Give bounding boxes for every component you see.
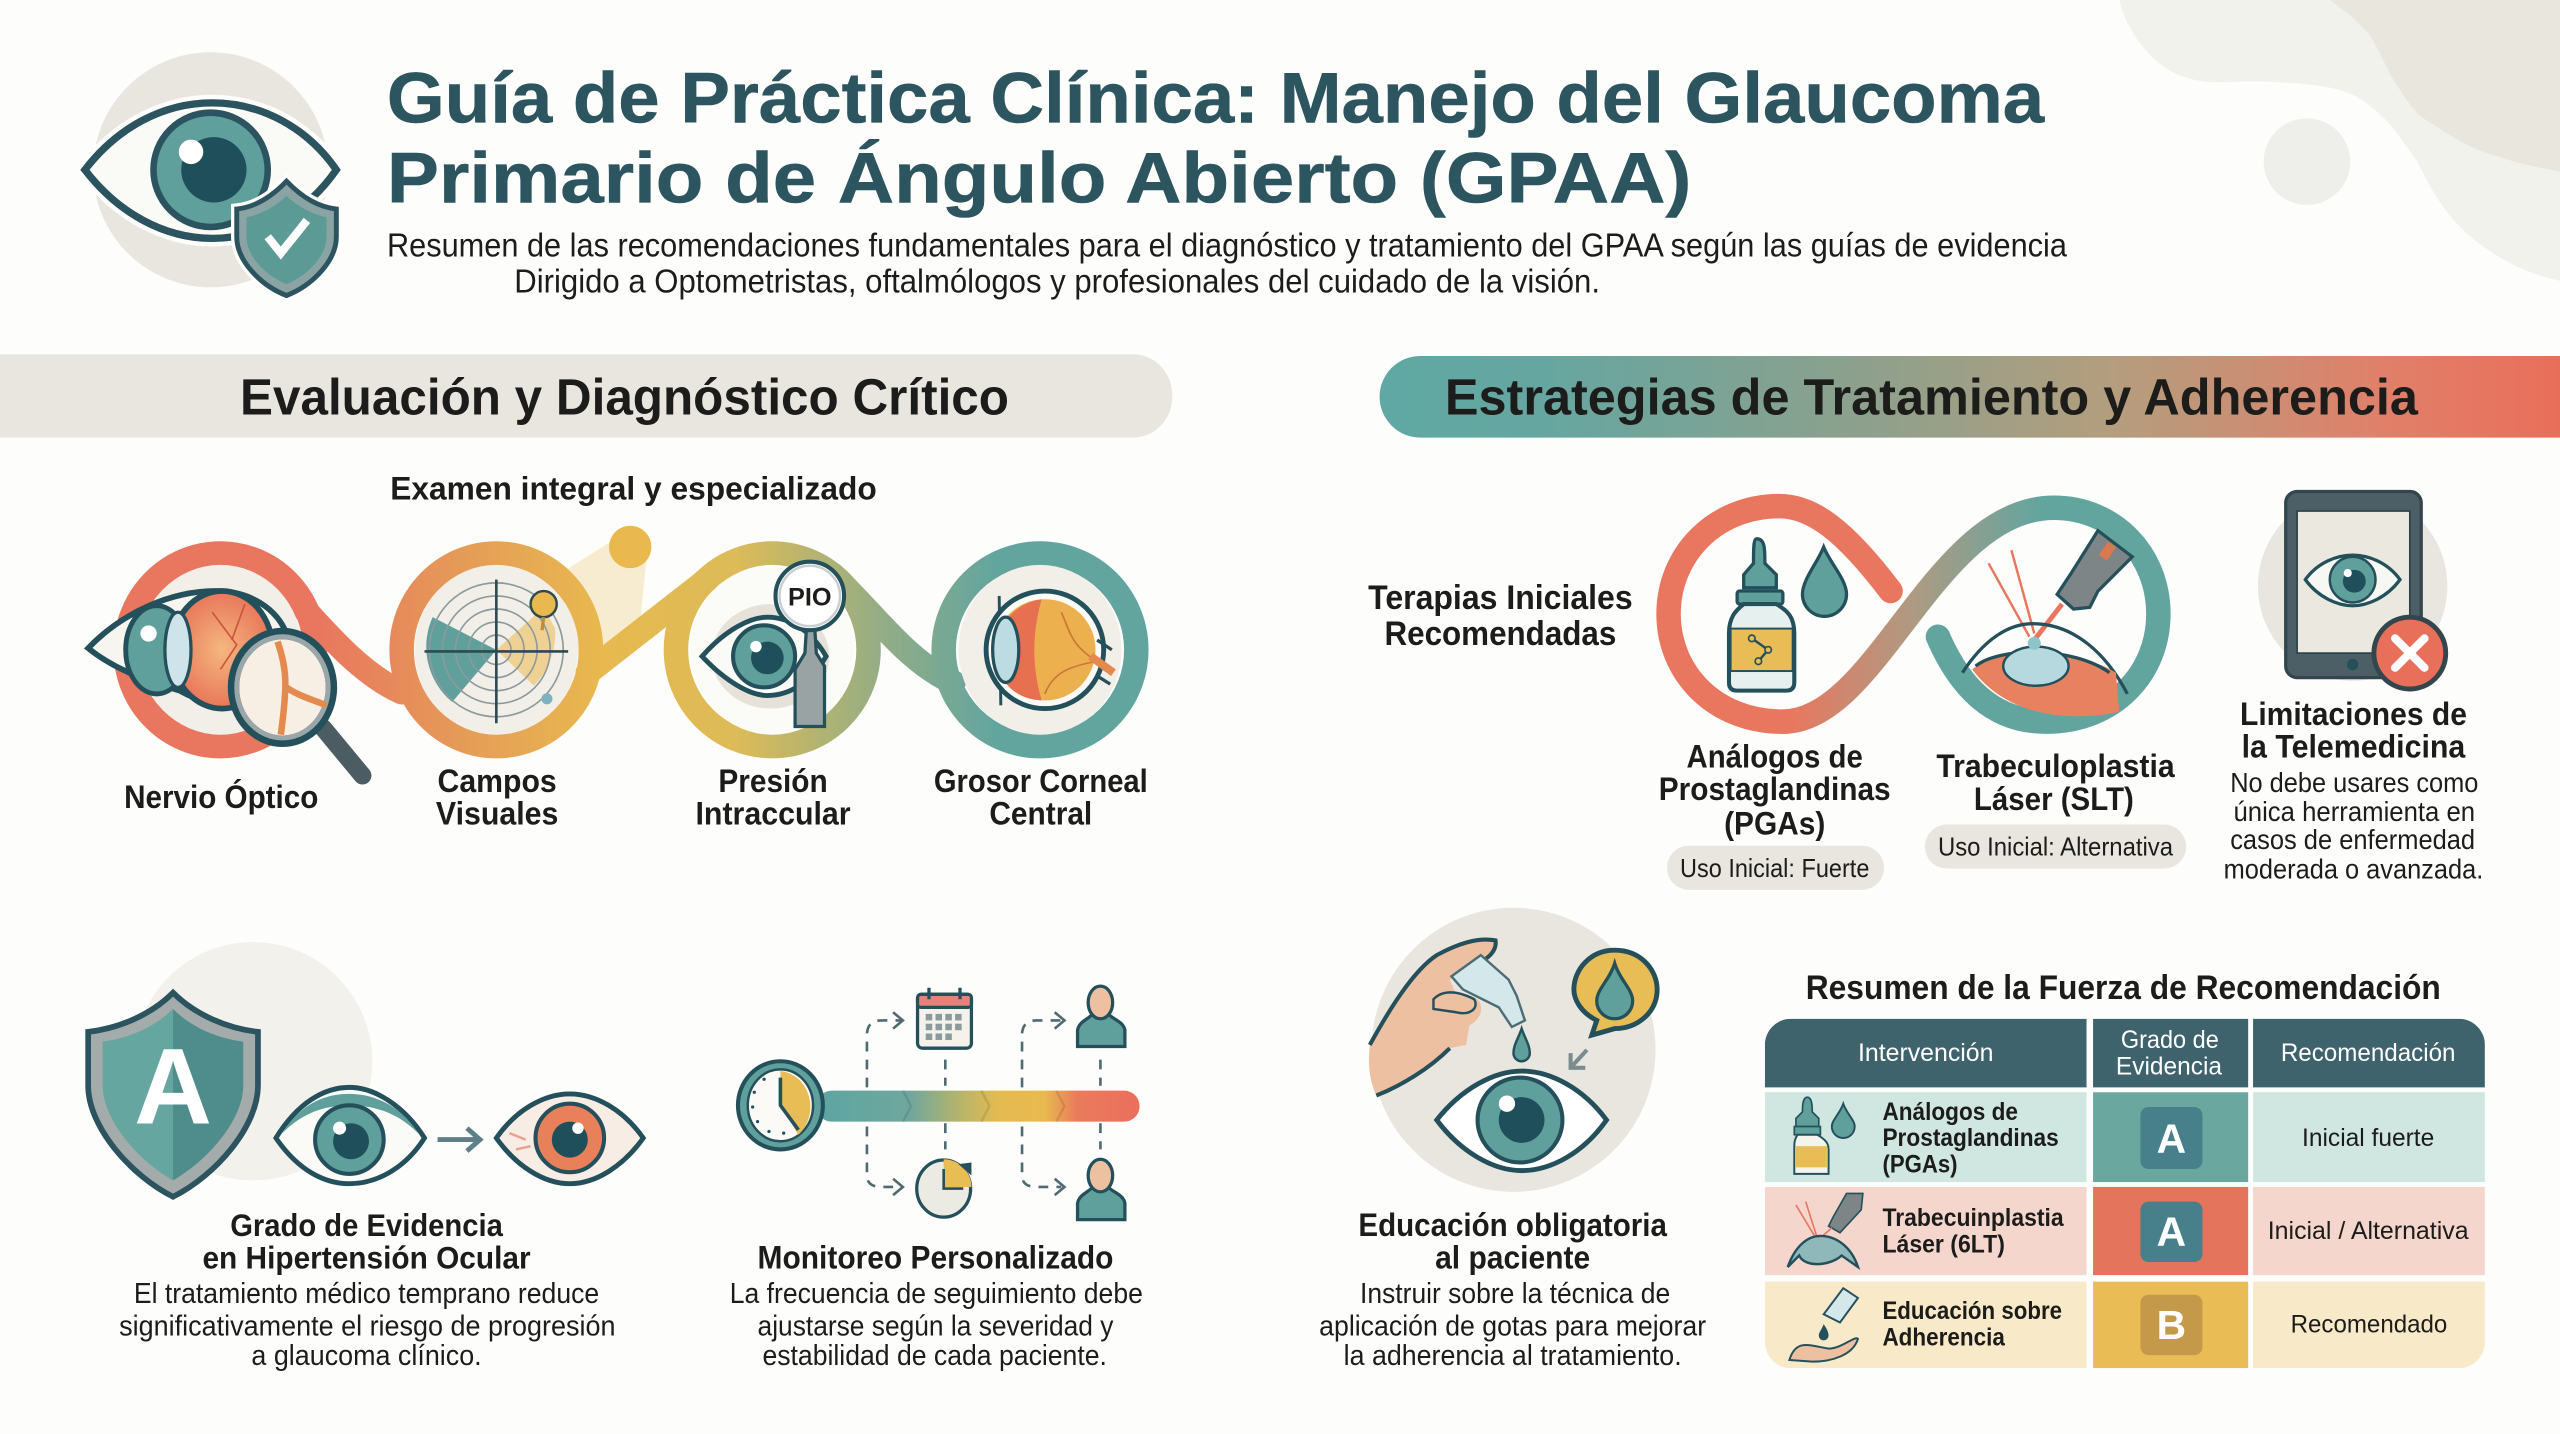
icon: escudo A and eye progression: A	[134, 1025, 212, 1146]
label: análogos de prostaglandinas: (PGAs)	[1724, 804, 1825, 841]
icon: nervio óptico eye with magnifier	[88, 591, 362, 776]
text block: educación obligatoria	[1319, 1206, 1707, 1372]
table header: Grado de	[2121, 1026, 2219, 1054]
badge: uso inicial alternativa	[1925, 825, 2186, 869]
subheading: examen integral: Examen integral y especializado	[390, 470, 877, 507]
diagram: timeline de monitoreo	[738, 986, 1140, 1220]
row: análogos: Análogos de	[1882, 1098, 2018, 1126]
icon: presión intraocular eye and PIO lens: PIO	[788, 584, 832, 612]
text block: educación obligatoria: la adherencia al tratamiento.	[1344, 1340, 1682, 1372]
label: análogos de prostaglandinas: Prostaglandinas	[1659, 770, 1891, 807]
icon: educación gotas en el ojo	[1369, 908, 1657, 1192]
table title: Resumen de la Fuerza de Recomendación	[1806, 969, 2441, 1007]
text block: monitoreo personalizado: ajustarse según la severidad y	[758, 1311, 1114, 1343]
section heading: diagnóstico: Evaluación y Diagnóstico Crítico	[240, 369, 1009, 426]
table: fuerza de recomendación	[1765, 1019, 2485, 1368]
row: trabeculoplastia: Trabecuinplastia	[1882, 1204, 2065, 1232]
row: análogos: Inicial fuerte	[2302, 1124, 2434, 1152]
icon: escudo A and eye progression	[88, 942, 643, 1197]
subtitle	[387, 227, 2067, 300]
label: presión intraocular	[696, 762, 851, 832]
section heading: tratamiento	[1380, 356, 2560, 438]
row: trabeculoplastia	[1788, 1193, 2469, 1267]
label: terapias iniciales	[1368, 579, 1633, 653]
icon: láser SLT	[1962, 531, 2132, 716]
label: trabeculoplastia láser: Trabeculoplastia	[1936, 747, 2175, 784]
table header: Recomendación	[2281, 1039, 2456, 1067]
text block: grado de evidencia: Grado de Evidencia	[230, 1207, 503, 1243]
row: educación: B	[2157, 1302, 2186, 1348]
label: grosor corneal: Grosor Corneal	[934, 762, 1148, 799]
text block: monitoreo personalizado	[730, 1239, 1143, 1372]
label: terapias iniciales: Recomendadas	[1384, 615, 1616, 653]
row: análogos: A	[2157, 1116, 2186, 1162]
text block: limitaciones de la telemedicina: No debe usares como	[2230, 767, 2478, 798]
section heading: tratamiento: Estrategias de Tratamiento y Adherencia	[1445, 369, 2419, 426]
header: logo eye with shield	[85, 52, 336, 296]
label: análogos de prostaglandinas	[1659, 737, 1891, 841]
text block: monitoreo personalizado: La frecuencia de seguimiento debe	[730, 1278, 1143, 1310]
section heading: diagnóstico	[0, 354, 1172, 438]
text block: educación obligatoria: aplicación de gotas para mejorar	[1319, 1311, 1707, 1343]
row: educación: Educación sobre	[1882, 1297, 2062, 1325]
row: trabeculoplastia: Láser (6LT)	[1882, 1230, 2005, 1258]
label: análogos de prostaglandinas: Análogos de	[1687, 737, 1863, 774]
badge: uso inicial fuerte: Uso Inicial: Fuerte	[1680, 853, 1869, 883]
text block: limitaciones de la telemedicina: la Telemedicina	[2242, 728, 2466, 765]
icon: tablet telemedicina	[2258, 491, 2447, 689]
table header	[1858, 1026, 2456, 1080]
title	[387, 58, 2045, 218]
row: educación	[1789, 1288, 2447, 1362]
infinity ribbon	[1669, 506, 2158, 722]
icon: campos visuales target	[424, 580, 568, 723]
label: trabeculoplastia láser	[1936, 747, 2175, 817]
icon: presión intraocular eye and PIO lens	[702, 562, 844, 727]
text block: limitaciones de la telemedicina: Limitaciones de	[2240, 695, 2467, 732]
badge: uso inicial alternativa: Uso Inicial: Alternativa	[1938, 832, 2173, 862]
text block: monitoreo personalizado: estabilidad de cada paciente.	[762, 1340, 1107, 1372]
row: trabeculoplastia: Inicial / Alternativa	[2268, 1217, 2469, 1245]
row: trabeculoplastia: A	[2157, 1209, 2186, 1255]
text block: grado de evidencia: El tratamiento médico temprano reduce	[134, 1278, 599, 1310]
icon: gotero de prostaglandinas	[1729, 539, 1847, 691]
text block: limitaciones de la telemedicina: moderada o avanzada.	[2224, 853, 2483, 884]
title: Guía de Práctica Clínica: Manejo del Glaucoma	[387, 58, 2045, 138]
badge: uso inicial fuerte	[1667, 846, 1884, 890]
text block: grado de evidencia: a glaucoma clínico.	[251, 1340, 482, 1372]
label: grosor corneal	[934, 762, 1148, 832]
text block: educación obligatoria: al paciente	[1435, 1239, 1590, 1276]
label: presión intraocular: Intraccular	[696, 795, 851, 832]
table header: Evidencia	[2116, 1052, 2223, 1080]
text block: limitaciones de la telemedicina: única herramienta en	[2233, 796, 2475, 827]
text block: grado de evidencia: significativamente el riesgo de progresión	[119, 1311, 616, 1343]
label: campos visuales	[436, 762, 558, 832]
title: Primario de Ángulo Abierto (GPAA)	[387, 138, 1691, 218]
row: educación: Adherencia	[1882, 1323, 2006, 1351]
row: análogos	[1794, 1097, 2434, 1178]
label: campos visuales: Campos	[438, 762, 557, 799]
subtitle: Resumen de las recomendaciones fundamentales para el diagnóstico y tratamiento del GPAA según las guías de evidencia	[387, 227, 2067, 264]
label: nervio óptico: Nervio Óptico	[124, 778, 318, 815]
exam wave ribbon	[126, 526, 1136, 746]
label: grosor corneal: Central	[989, 795, 1092, 832]
subtitle: Dirigido a Optometristas, oftalmólogos y profesionales del cuidado de la visión.	[514, 263, 1600, 300]
label: trabeculoplastia láser: Láser (SLT)	[1974, 780, 2134, 817]
label: campos visuales: Visuales	[436, 795, 558, 832]
row: análogos: (PGAs)	[1882, 1150, 1958, 1178]
decorative corner shapes	[2119, 0, 2560, 281]
text block: grado de evidencia: en Hipertensión Ocular	[202, 1240, 531, 1276]
label: terapias iniciales: Terapias Iniciales	[1368, 579, 1633, 617]
row: educación: Recomendado	[2291, 1310, 2447, 1338]
table header: Intervención	[1858, 1039, 1993, 1067]
text block: limitaciones de la telemedicina: casos de enfermedad	[2230, 824, 2475, 855]
text block: educación obligatoria: Instruir sobre la técnica de	[1360, 1278, 1670, 1310]
label: presión intraocular: Presión	[718, 762, 828, 799]
text block: limitaciones de la telemedicina	[2224, 695, 2483, 884]
text block: monitoreo personalizado: Monitoreo Personalizado	[758, 1239, 1113, 1276]
icon: corte de globo ocular	[986, 591, 1113, 709]
text block: grado de evidencia	[119, 1207, 616, 1372]
text block: educación obligatoria: Educación obligatoria	[1358, 1206, 1668, 1243]
row: análogos: Prostaglandinas	[1882, 1124, 2059, 1152]
